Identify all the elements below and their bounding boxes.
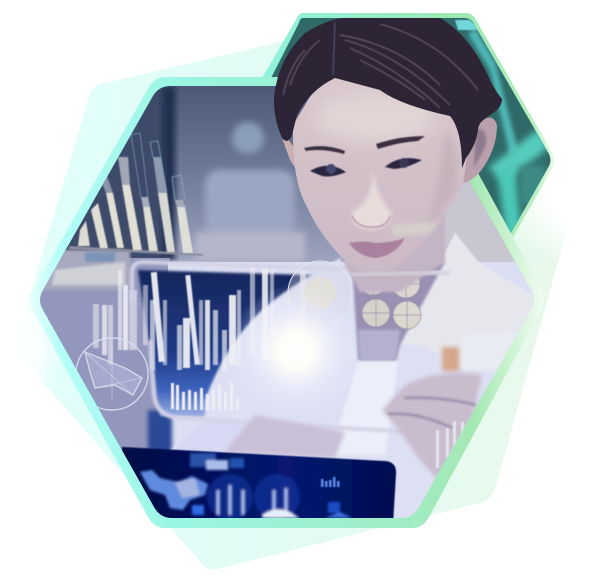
dark data panel bbox=[136, 268, 314, 418]
eyebrows bbox=[304, 146, 345, 154]
large pie hologram bbox=[288, 260, 352, 312]
main hexagon border bbox=[30, 77, 544, 528]
hair bbox=[274, 18, 502, 168]
pie chart icons bbox=[362, 278, 422, 330]
blurred lab background bbox=[30, 86, 540, 524]
glass panel outline bbox=[132, 262, 450, 432]
bar chart: upper hologram bbox=[68, 133, 204, 256]
radar chart icon bbox=[76, 338, 148, 410]
neck bbox=[342, 214, 446, 293]
main hexagon photo bbox=[30, 86, 540, 525]
right ear bbox=[455, 118, 497, 183]
tablet mini chart bbox=[321, 477, 340, 487]
woman's head bbox=[274, 18, 502, 292]
eyes bbox=[310, 158, 422, 176]
small bars over hand bbox=[436, 421, 464, 468]
face bbox=[293, 70, 467, 272]
glass reflection across neck bbox=[350, 272, 450, 275]
small back hexagon bbox=[262, 13, 554, 237]
map strip bbox=[52, 252, 125, 285]
nose bbox=[352, 216, 390, 227]
lips bbox=[349, 238, 405, 258]
light flare bbox=[236, 287, 340, 394]
white hologram bars bbox=[93, 265, 306, 410]
hair highlights bbox=[283, 22, 478, 108]
tablet bbox=[122, 447, 396, 525]
lab coat and shirt bbox=[165, 233, 540, 525]
left ear bbox=[281, 133, 300, 175]
hands bbox=[225, 347, 482, 480]
map hologram bbox=[463, 352, 507, 370]
